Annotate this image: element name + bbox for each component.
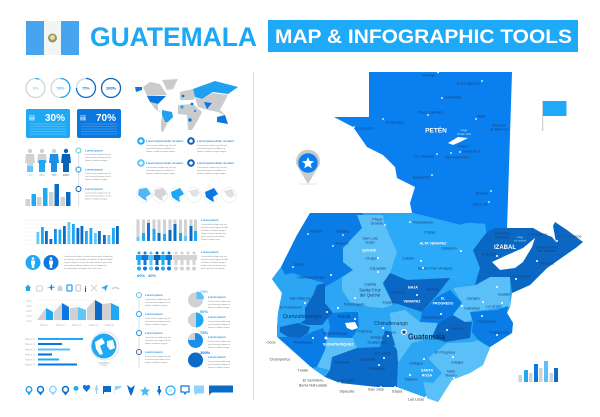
place labels: Lago bbox=[461, 128, 468, 132]
place labels: Joyabaj bbox=[382, 300, 396, 304]
four bullet text items: Lorem ipsum dolor sit amet bbox=[146, 161, 183, 165]
place labels: Ixcán bbox=[365, 240, 375, 244]
travel icons row bbox=[25, 284, 119, 294]
place labels: Chisec bbox=[424, 230, 436, 234]
place labels: Salamá bbox=[425, 286, 439, 292]
people caption: sed eiusmod tempor incidid bbox=[201, 258, 228, 261]
place labels: Las Lisas bbox=[408, 396, 424, 402]
timeline with pie charts: 75% bbox=[200, 330, 208, 335]
horizontal bar chart: Name 5 bbox=[25, 358, 35, 362]
place labels: Huehuetenango bbox=[297, 274, 325, 280]
people caption bbox=[201, 250, 228, 270]
percentage rings: 0% bbox=[33, 86, 39, 90]
timeline with pie charts: labore et dolore magna bbox=[145, 304, 168, 307]
place labels: Modesto bbox=[495, 230, 509, 236]
place labels: Totonicapán bbox=[344, 302, 364, 306]
place labels: Sololá bbox=[338, 314, 351, 319]
stat card 70% bbox=[77, 109, 121, 138]
person percentage chart: 75% bbox=[51, 173, 57, 177]
gender caption: sed do eiusmod tempor incididunt ut labore dolore bbox=[64, 258, 113, 261]
people row with dots bbox=[136, 252, 197, 278]
timeline with pie charts: Consectetur adipiscing elit bbox=[145, 298, 171, 301]
place labels: EL bbox=[441, 296, 446, 300]
blue flag icon bbox=[542, 101, 566, 131]
place labels: Barra Nahualate bbox=[299, 382, 327, 388]
location pin with star bbox=[296, 150, 320, 185]
four bullet text items: eiusmod tempor incididunt ut bbox=[146, 169, 174, 172]
place labels: Soloma bbox=[335, 240, 349, 246]
timeline with pie charts: Consectetur adipiscing bbox=[208, 340, 231, 343]
place labels: Livingston bbox=[529, 232, 547, 236]
four bullet text items: labore et dolore magna aliqua bbox=[197, 150, 227, 153]
timeline with pie charts: labore et dolore magn bbox=[208, 366, 230, 369]
region: Zacapa bbox=[453, 277, 510, 322]
area chart: 2000 bbox=[26, 309, 32, 313]
place labels: de Mencos bbox=[489, 126, 509, 132]
people caption: aliqua enim ad minim veni bbox=[201, 265, 227, 267]
percentage rings: 50% bbox=[56, 86, 65, 90]
timeline with pie charts: sed eiusmod tempor incid bbox=[145, 339, 171, 342]
timeline with pie charts: Consectetur adipiscing bbox=[208, 300, 231, 303]
stat card 30%: ііі bbox=[29, 114, 35, 122]
place labels: Taxisco bbox=[405, 376, 417, 382]
timeline with pie charts: sed eiusmod tempor in bbox=[208, 303, 231, 306]
place labels: Santa Ana bbox=[462, 148, 481, 154]
chart caption: Consectetur adipiscing elit bbox=[201, 223, 227, 226]
place labels: Guatemala bbox=[408, 332, 445, 342]
person percentage chart: 100% bbox=[63, 173, 70, 177]
place labels: Méndez bbox=[495, 234, 509, 240]
horizontal bar chart: Name 6 bbox=[25, 362, 35, 366]
place labels: Sayaxché bbox=[412, 174, 430, 180]
timeline text list: Lorem ipsum bbox=[85, 148, 103, 152]
subtitle banner bbox=[268, 20, 578, 52]
place labels: Mazatenango bbox=[323, 330, 347, 336]
gender caption: Lorem ipsum dolor sit amet consectetur adipiscing bbox=[64, 255, 113, 258]
place labels: Poptún bbox=[476, 190, 488, 196]
place labels: Champerico bbox=[270, 356, 290, 362]
place labels: ALTA VERAPAZ bbox=[420, 242, 447, 246]
region: Huehuetenango bbox=[281, 213, 363, 287]
timeline with pie charts: sed eiusmod tempor incid bbox=[145, 358, 171, 361]
column chart wide bbox=[25, 220, 120, 244]
place labels: Esquipulas bbox=[489, 330, 509, 334]
place labels: Chiquimula bbox=[476, 318, 497, 324]
area chart: 3000 bbox=[26, 304, 32, 308]
place labels: Rubelsanto bbox=[413, 220, 433, 224]
place labels: SANTA bbox=[421, 368, 433, 372]
place labels: Puerto Barrios bbox=[557, 234, 581, 238]
chart caption: Lorem ipsum bbox=[201, 218, 219, 222]
region: Quiché bbox=[342, 215, 397, 308]
people caption: Lorem ipsum bbox=[201, 250, 219, 254]
place labels: Canillá bbox=[364, 282, 377, 286]
region: Sololá bbox=[327, 312, 359, 338]
place labels: Lago bbox=[517, 235, 524, 239]
place labels: Tecojate bbox=[340, 378, 354, 382]
timeline with pie charts: Lorem ipsum bbox=[208, 355, 226, 359]
chart caption: quis nostrud exercitation bbox=[201, 235, 225, 238]
place labels: Melchor bbox=[492, 122, 507, 128]
place labels bbox=[266, 72, 581, 402]
percentage rings: 75% bbox=[82, 86, 90, 90]
place labels: Paso Caballos bbox=[418, 110, 444, 114]
area chart: Point 2 bbox=[56, 323, 65, 327]
place labels: PETÉN bbox=[425, 126, 447, 134]
area chart: Point 3 bbox=[72, 323, 81, 327]
map pins and marker icons row bbox=[26, 385, 233, 396]
region: Chimaltenango west bbox=[358, 310, 392, 348]
travel icons row: i bbox=[84, 285, 87, 294]
place labels: Rabinal bbox=[391, 290, 405, 294]
region: Petén bbox=[334, 72, 512, 232]
place labels: de Izabal bbox=[514, 238, 526, 242]
place labels: La Unión bbox=[486, 304, 502, 308]
lake Izabal bbox=[492, 238, 535, 270]
region: Alta Verapaz bbox=[383, 213, 486, 285]
region: Guatemala bbox=[432, 315, 472, 342]
timeline text list: Consectetur adipiscing elit bbox=[85, 153, 111, 156]
place labels: Gualán bbox=[498, 292, 510, 296]
capital star marker bbox=[401, 329, 407, 335]
timeline with pie charts: Consectetur adipiscing elit bbox=[145, 317, 171, 320]
timeline text list: Consectetur adipiscing elit bbox=[85, 172, 111, 175]
timeline text list bbox=[76, 148, 111, 207]
place labels: QUICHÉ bbox=[362, 248, 377, 252]
four bullet text items: eiusmod tempor incididunt ut bbox=[197, 147, 225, 150]
horizontal bar chart bbox=[25, 337, 83, 366]
place labels: San Francisco bbox=[445, 154, 469, 160]
region: El Progreso bbox=[420, 290, 462, 323]
globes row bbox=[136, 188, 236, 202]
timeline with pie charts: Consectetur adipiscing elit bbox=[145, 355, 171, 358]
place labels: VERAPAZ bbox=[404, 300, 421, 304]
place labels: Grande bbox=[371, 220, 383, 226]
stat card 30%: 30% bbox=[45, 113, 65, 124]
area chart: Point 4 bbox=[89, 323, 98, 327]
globe icon bbox=[91, 332, 119, 367]
place labels: Mixco bbox=[386, 330, 396, 334]
map of Guatemala bbox=[266, 72, 583, 402]
timeline with pie charts: Lorem ipsum bbox=[145, 331, 163, 335]
four bullet text items: eiusmod tempor incididunt ut bbox=[146, 147, 174, 150]
horizontal bar chart: Name 3 bbox=[25, 348, 35, 352]
lake Petén Itzá bbox=[448, 137, 468, 145]
lake Atitlán bbox=[345, 322, 358, 330]
place labels: Quetzaltenango bbox=[283, 314, 321, 320]
timeline text list: Lorem ipsum bbox=[85, 168, 103, 172]
place labels: El Estor bbox=[482, 252, 497, 256]
place labels: Escuintla bbox=[375, 350, 392, 356]
people row with dots: 60% bbox=[137, 273, 145, 278]
timeline with pie charts: Lorem ipsum bbox=[208, 335, 226, 339]
flag of Guatemala bbox=[26, 21, 79, 55]
place labels: BAJA bbox=[408, 286, 418, 290]
place labels: Chajul bbox=[365, 256, 377, 260]
four bullet text items: Consectetur adipiscing elit sed bbox=[146, 166, 176, 169]
place labels: Dos Lagunas bbox=[457, 80, 480, 86]
region: Baja Verapaz bbox=[383, 273, 450, 312]
four bullet text items: labore et dolore magna aliqua bbox=[146, 172, 176, 175]
timeline with pie charts: Consectetur adipiscing bbox=[208, 320, 231, 323]
region: Izabal bbox=[473, 222, 583, 293]
region: Chiquimula bbox=[470, 306, 513, 347]
place labels: de Castilla bbox=[538, 248, 557, 253]
horizontal bar chart: Name 4 bbox=[25, 352, 35, 356]
gender caption: magna aliqua ut enim ad minim veniam quis nostr bbox=[64, 261, 112, 264]
stat card 30% bbox=[26, 109, 70, 138]
four bullet text items: Lorem ipsum dolor sit amet bbox=[197, 161, 234, 165]
place labels: Santa Cruz Verapaz bbox=[418, 266, 452, 270]
globe icon: Lorem bbox=[100, 363, 108, 367]
people caption: ut labore et dolore magna bbox=[201, 261, 227, 264]
place labels: Los Amates bbox=[510, 274, 530, 278]
place labels: San José bbox=[368, 386, 384, 392]
place labels: Zacapa bbox=[467, 296, 480, 300]
region: Quetzaltenango bbox=[300, 283, 333, 325]
place labels: Nentón bbox=[310, 228, 322, 234]
timeline with pie charts: 25% bbox=[200, 289, 208, 294]
region: Jutiapa bbox=[423, 340, 490, 402]
place labels: Barillas bbox=[337, 228, 349, 234]
bar chart small bbox=[26, 184, 70, 206]
horizontal bar chart: Name 2 bbox=[25, 342, 35, 346]
place labels: del Quiché bbox=[360, 292, 381, 298]
region: Escuintla bbox=[325, 345, 398, 387]
timeline with pie charts: Lorem ipsum bbox=[208, 295, 226, 299]
place labels: Antigua bbox=[370, 334, 384, 340]
timeline with pie charts: Lorem ipsum bbox=[145, 350, 163, 354]
southern departments silhouette bbox=[272, 213, 577, 402]
timeline text list: Consectetur adipiscing elit bbox=[85, 192, 111, 194]
place labels: Jutiapa bbox=[451, 360, 464, 364]
place labels: Cahabón bbox=[441, 246, 457, 250]
place labels: Iztapa bbox=[392, 388, 403, 394]
region: Sacatepéquez bbox=[380, 330, 395, 347]
place labels: Flores bbox=[458, 144, 468, 148]
timeline with pie charts: 50% bbox=[200, 309, 208, 314]
timeline with pie charts: sed eiusmod tempor incid bbox=[145, 301, 171, 304]
city dots bbox=[276, 72, 558, 398]
timeline with pie charts: Consectetur adipiscing elit bbox=[145, 336, 171, 339]
chart caption: ut labore et dolore magna bbox=[201, 229, 227, 232]
place labels: Playa bbox=[372, 216, 383, 222]
place labels: Cuilco bbox=[294, 262, 304, 266]
place labels: Uspantán bbox=[370, 266, 386, 270]
place labels: Sipacate bbox=[339, 388, 355, 394]
place labels: ROSA bbox=[422, 374, 433, 378]
chart caption: aliqua enim ad minim veni bbox=[201, 233, 227, 235]
place labels: Santo Tomás bbox=[536, 244, 558, 250]
people caption: Consectetur adipiscing elit bbox=[201, 255, 227, 258]
timeline with pie charts: sed eiusmod tempor in bbox=[208, 363, 231, 366]
place labels: Paxbán bbox=[422, 72, 436, 78]
place labels: Jalapa bbox=[451, 326, 464, 330]
region: Santa Rosa bbox=[397, 342, 445, 398]
four bullet text items: labore et dolore magna aliqua bbox=[197, 172, 227, 175]
area chart: Point 1 bbox=[40, 323, 49, 327]
timeline with pie charts: Consectetur adipiscing bbox=[208, 360, 231, 363]
place labels: Cuilapa bbox=[409, 360, 423, 366]
place labels: El Progreso bbox=[435, 350, 455, 354]
people row with dots: 40% bbox=[148, 273, 156, 278]
place labels: San Marcos bbox=[290, 296, 310, 300]
timeline with pie charts: Lorem ipsum bbox=[145, 312, 163, 316]
chart caption: ullamco laboris nisi bbox=[201, 238, 220, 241]
four bullet text items bbox=[138, 138, 234, 175]
gender icons bbox=[26, 255, 58, 270]
area chart: Point 5 bbox=[105, 323, 114, 327]
timeline with pie charts bbox=[136, 289, 231, 369]
timeline with pie charts: sed eiusmod tempor in bbox=[208, 343, 231, 346]
person percentage chart bbox=[25, 149, 71, 177]
place labels: Retalhuleu bbox=[294, 340, 312, 344]
timeline text list: Lorem ipsum bbox=[85, 187, 103, 191]
area chart: 1000 bbox=[26, 319, 32, 323]
four bullet text items: Lorem ipsum dolor sit amet bbox=[146, 139, 183, 143]
world map bbox=[135, 79, 238, 132]
place labels: PROGRESO bbox=[433, 302, 454, 306]
place labels: Valle bbox=[447, 368, 455, 374]
stat card 70%: 70% bbox=[96, 113, 116, 124]
timeline with pie charts: labore et dolore magna bbox=[145, 342, 168, 345]
timeline with pie charts: 100% bbox=[200, 350, 211, 355]
timeline with pie charts: labore et dolore magna bbox=[145, 323, 168, 326]
timeline with pie charts: Lorem ipsum bbox=[208, 315, 226, 319]
timeline with pie charts: labore et dolore magna bbox=[145, 361, 168, 364]
person percentage chart: 50% bbox=[39, 173, 45, 177]
place labels: Tulate bbox=[298, 368, 308, 372]
place labels: Nuevo bbox=[445, 372, 457, 378]
timeline text list: sed eiusmod tempor incidi bbox=[85, 175, 111, 178]
gender caption: exercitation ullamco laboris nisi ut aliquip ex bbox=[64, 264, 107, 267]
percentage rings: 100% bbox=[106, 86, 117, 90]
area chart: 4000 bbox=[26, 299, 32, 303]
timeline with pie charts: Lorem ipsum bbox=[145, 293, 163, 297]
region: Suchitepéquez bbox=[317, 338, 357, 370]
place labels: IZABAL bbox=[494, 245, 516, 251]
place labels: Tikal bbox=[477, 114, 485, 118]
timeline text list: sed eiusmod tempor incidi bbox=[85, 156, 111, 159]
horizontal bar chart: Name 1 bbox=[25, 337, 35, 341]
timeline text list: labore et dolore magna bbox=[85, 198, 108, 200]
place labels: La Libertad bbox=[414, 154, 434, 158]
percentage rings bbox=[26, 78, 120, 98]
place labels: Guastatoya bbox=[423, 314, 444, 320]
title: GUATEMALA bbox=[90, 22, 257, 52]
chart caption bbox=[201, 218, 228, 241]
timeline with pie charts: labore et dolore magn bbox=[208, 326, 230, 329]
region: Totonicapán bbox=[325, 277, 360, 313]
people caption: quis nostrud exercitation bbox=[201, 267, 225, 270]
place labels: San Luis bbox=[362, 236, 378, 240]
place labels: Guatemala bbox=[367, 340, 387, 344]
stat card 70%: ііі bbox=[80, 114, 86, 122]
place labels: Cabañas bbox=[464, 306, 480, 310]
timeline with pie charts: sed eiusmod tempor incid bbox=[145, 320, 171, 323]
timeline with pie charts: labore et dolore magn bbox=[208, 306, 230, 309]
place labels: Masagua bbox=[369, 366, 386, 370]
small bar chart icon bbox=[518, 361, 558, 382]
place labels: El Tumbador bbox=[280, 304, 303, 310]
place labels: El Semillero bbox=[303, 378, 323, 382]
timeline text list: labore et dolore magna bbox=[85, 159, 108, 162]
region: Retalhuleu bbox=[280, 323, 310, 338]
region: Suchitepéquez coast bbox=[278, 328, 327, 368]
place labels: Tiquisate bbox=[334, 360, 350, 364]
place labels: Santa Cruz bbox=[359, 288, 381, 292]
region: San Marcos bbox=[272, 267, 317, 330]
place labels: El Naranjo bbox=[386, 120, 404, 124]
four bullet text items: Lorem ipsum dolor sit amet bbox=[197, 139, 234, 143]
place labels: Carmelita bbox=[445, 94, 462, 100]
region: Chimaltenango bbox=[390, 310, 438, 363]
timeline with pie charts: sed eiusmod tempor in bbox=[208, 323, 231, 326]
stacked column chart bbox=[136, 220, 197, 241]
place labels: Morales bbox=[540, 260, 554, 266]
timeline text list: sed eiusmod tempor incidi bbox=[85, 194, 111, 198]
gender caption: ea commodo consequat duis aute irure bbox=[64, 267, 103, 270]
place labels: Petén Itzá bbox=[457, 132, 471, 136]
timeline with pie charts: labore et dolore magn bbox=[208, 346, 230, 349]
place labels: Siquinalá bbox=[359, 356, 376, 362]
four bullet text items: Consectetur adipiscing elit sed bbox=[146, 144, 176, 147]
place labels: Ocós bbox=[266, 340, 276, 344]
gender caption bbox=[64, 255, 113, 270]
place labels: San Luis bbox=[472, 202, 488, 206]
place labels: Chimaltenango bbox=[374, 321, 408, 327]
place labels: SUCHITEPÉQUEZ bbox=[323, 342, 354, 346]
four bullet text items: Consectetur adipiscing elit sed bbox=[197, 166, 227, 169]
place labels: Cobán bbox=[402, 256, 414, 260]
place labels: Lacandón bbox=[356, 126, 374, 130]
person percentage chart: 25% bbox=[27, 173, 33, 177]
timeline text list: labore et dolore magna bbox=[85, 178, 108, 181]
area chart: 1000 bbox=[26, 314, 32, 318]
area chart bbox=[26, 299, 119, 327]
chart caption: sed eiusmod tempor incidid bbox=[201, 226, 228, 229]
four bullet text items: eiusmod tempor incididunt ut bbox=[197, 169, 225, 172]
four bullet text items: Consectetur adipiscing elit sed bbox=[197, 144, 227, 147]
place labels: Patzicía bbox=[358, 328, 373, 334]
four bullet text items: labore et dolore magna aliqua bbox=[146, 150, 176, 153]
subtitle banner: MAP & INFOGRAPHIC TOOLS bbox=[275, 26, 572, 48]
